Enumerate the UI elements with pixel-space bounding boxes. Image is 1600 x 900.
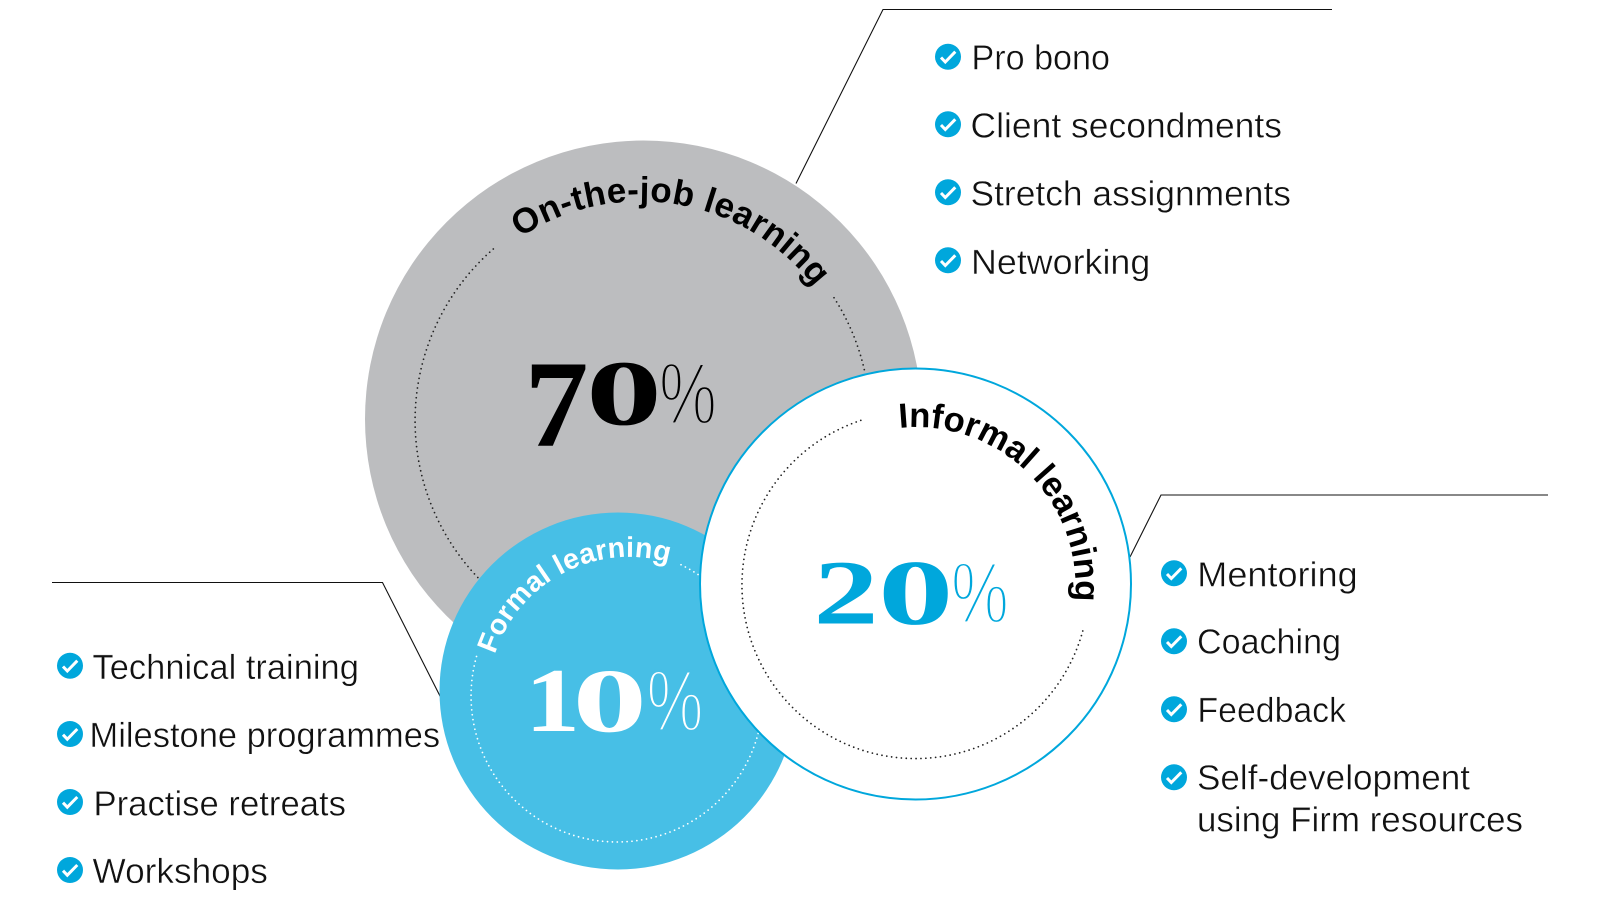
list item: Coaching: Coaching <box>1197 623 1341 662</box>
list: on-the-job learning activities <box>935 39 1291 282</box>
panel: 70% on-the-job learning circle <box>365 140 918 622</box>
list item: Technical training: Technical training <box>92 648 359 687</box>
panel: 10% formal learning circle <box>440 512 784 870</box>
stat: 70% <box>524 337 717 474</box>
stat: 10%: 1 <box>525 650 580 751</box>
stat: 10%: % <box>646 654 703 750</box>
leader line: formal learning <box>52 582 441 698</box>
heading: informal learning: Informal learning <box>900 404 1098 600</box>
list item: Workshops: Workshops <box>92 852 268 891</box>
stat: 10% <box>525 650 703 751</box>
list item: Self-development using Firm resources: using Firm resources <box>1197 800 1523 840</box>
list item: Self-development using Firm resources <box>1161 759 1523 840</box>
list item: Self-development using Firm resources: Self-development <box>1197 759 1470 798</box>
heading: on-the-job learning: On-the-job learning <box>512 176 828 287</box>
stat: 20%: % <box>951 545 1009 642</box>
list item: Mentoring: Mentoring <box>1197 555 1358 594</box>
list item: Stretch assignments: Stretch assignments <box>970 175 1291 214</box>
list: formal learning activities <box>57 648 440 891</box>
list item: Networking: Networking <box>971 243 1150 282</box>
stat: 20%: 2 <box>814 543 879 644</box>
stat: 70%: % <box>659 346 717 443</box>
stat: 70%: 7 <box>524 337 588 474</box>
panel: 20% informal learning circle <box>699 368 1132 800</box>
list item: Feedback: Feedback <box>1198 691 1346 730</box>
leader line: on-the-job learning <box>796 10 1332 184</box>
stat: 70%: 0 <box>586 343 662 445</box>
list item: Client secondments: Client secondments <box>970 106 1282 145</box>
leader line: informal learning <box>1130 495 1548 557</box>
stat: 10%: 0 <box>572 650 647 751</box>
heading: formal learning: Formal learning <box>477 536 670 653</box>
list: informal learning activities <box>1161 555 1523 840</box>
stat: 20%: 0 <box>878 542 953 645</box>
list item: Practise retreats: Practise retreats <box>94 784 346 824</box>
list item: Pro bono: Pro bono <box>972 39 1110 78</box>
list item: Milestone programmes: Milestone programmes <box>90 716 440 755</box>
stat: 20% <box>814 542 1009 645</box>
